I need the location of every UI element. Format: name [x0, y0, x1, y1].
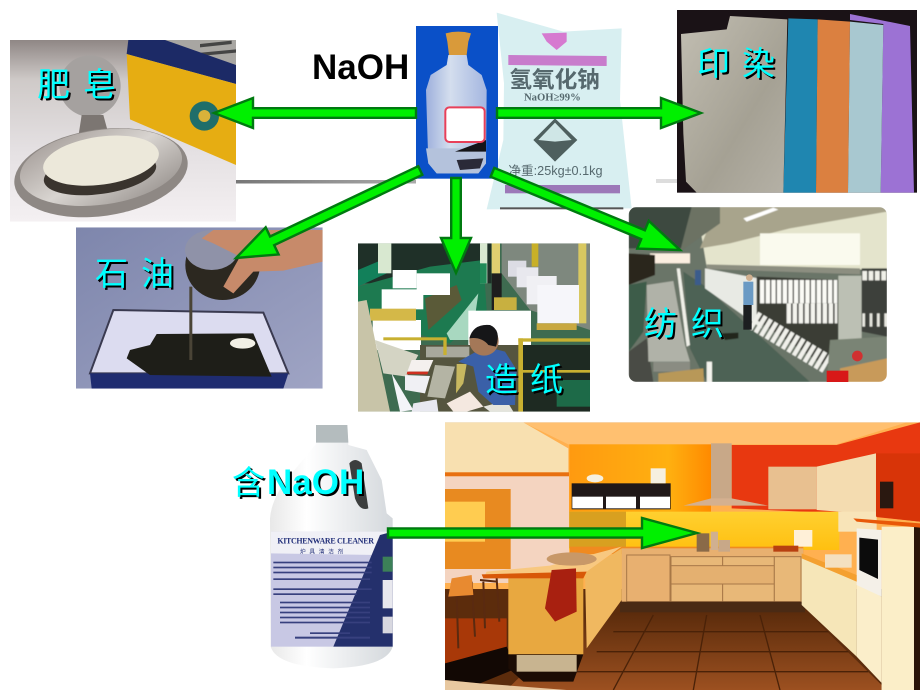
yellow box	[127, 54, 236, 165]
label: textile: 织	[691, 305, 724, 342]
grey cloth	[681, 16, 787, 193]
panel: NaOH bottle	[416, 26, 498, 179]
jug label: KITCHENWARE CLEANER	[277, 537, 374, 546]
heading: NaOH: NaOH	[312, 48, 409, 87]
floor	[511, 623, 882, 690]
panel: textile mill photo	[629, 207, 887, 382]
arrow: to paper	[441, 178, 471, 273]
decorative rule	[236, 180, 416, 184]
extractor hood	[683, 443, 768, 506]
floor	[683, 272, 810, 382]
shelves	[572, 468, 671, 509]
right cabinets	[802, 453, 920, 690]
beaker and hand	[185, 230, 323, 300]
label: soap: 皂	[83, 66, 116, 103]
label: paper: 造	[485, 361, 518, 398]
wall cabinets	[768, 453, 877, 532]
label: textile: 纺	[644, 305, 677, 342]
label: contains NaOH: NaOH	[267, 463, 364, 502]
panel: paper factory photo	[358, 243, 590, 412]
island	[482, 547, 622, 682]
label: petroleum: 石	[95, 255, 128, 292]
cap	[446, 32, 471, 55]
arrow: cleaner to kitchen	[388, 518, 697, 548]
panel: sodium hydroxide sack: 净重:25kg±0.1kg	[508, 163, 603, 178]
jug label	[271, 532, 393, 647]
panel: sodium hydroxide sack	[487, 13, 632, 209]
arrow: to dyeing	[497, 98, 701, 128]
base cabinets	[570, 547, 805, 612]
panel: sodium hydroxide sack: NaOH≥99%	[524, 93, 581, 104]
bottle label	[445, 107, 485, 142]
arrow: to soap	[214, 98, 416, 128]
label: dyeing: 印	[697, 45, 730, 82]
label: petroleum: 油	[141, 255, 174, 292]
arrow: to textile	[487, 158, 686, 264]
operator	[458, 325, 517, 405]
soap dish	[14, 59, 188, 218]
label: paper: 纸	[530, 361, 563, 398]
panel: soap photo	[8, 40, 236, 228]
label: contains NaOH: 含	[232, 464, 265, 501]
arrow: to petroleum	[230, 157, 427, 272]
worker	[743, 274, 753, 330]
paper stacks	[372, 260, 579, 350]
yellow splashback	[569, 512, 839, 550]
panel: kitchen photo	[445, 422, 920, 690]
bar stools	[456, 578, 500, 648]
label: dyeing: 染	[742, 45, 775, 82]
spinning machine	[707, 264, 860, 274]
panel: oil photo	[76, 227, 323, 389]
panel: kitchenware cleaner jug	[270, 425, 393, 668]
railing and dark equipment	[383, 337, 590, 412]
tray	[90, 287, 288, 389]
control desk	[358, 300, 520, 412]
orange wall	[569, 444, 711, 513]
panel: dyed fabric photo	[677, 10, 917, 193]
label: soap: 肥	[37, 66, 70, 103]
jug label: 炉具清洁剂	[300, 547, 344, 555]
left machine	[647, 281, 690, 362]
pots	[697, 530, 812, 552]
sack print: 氢氧化钠	[509, 66, 600, 92]
